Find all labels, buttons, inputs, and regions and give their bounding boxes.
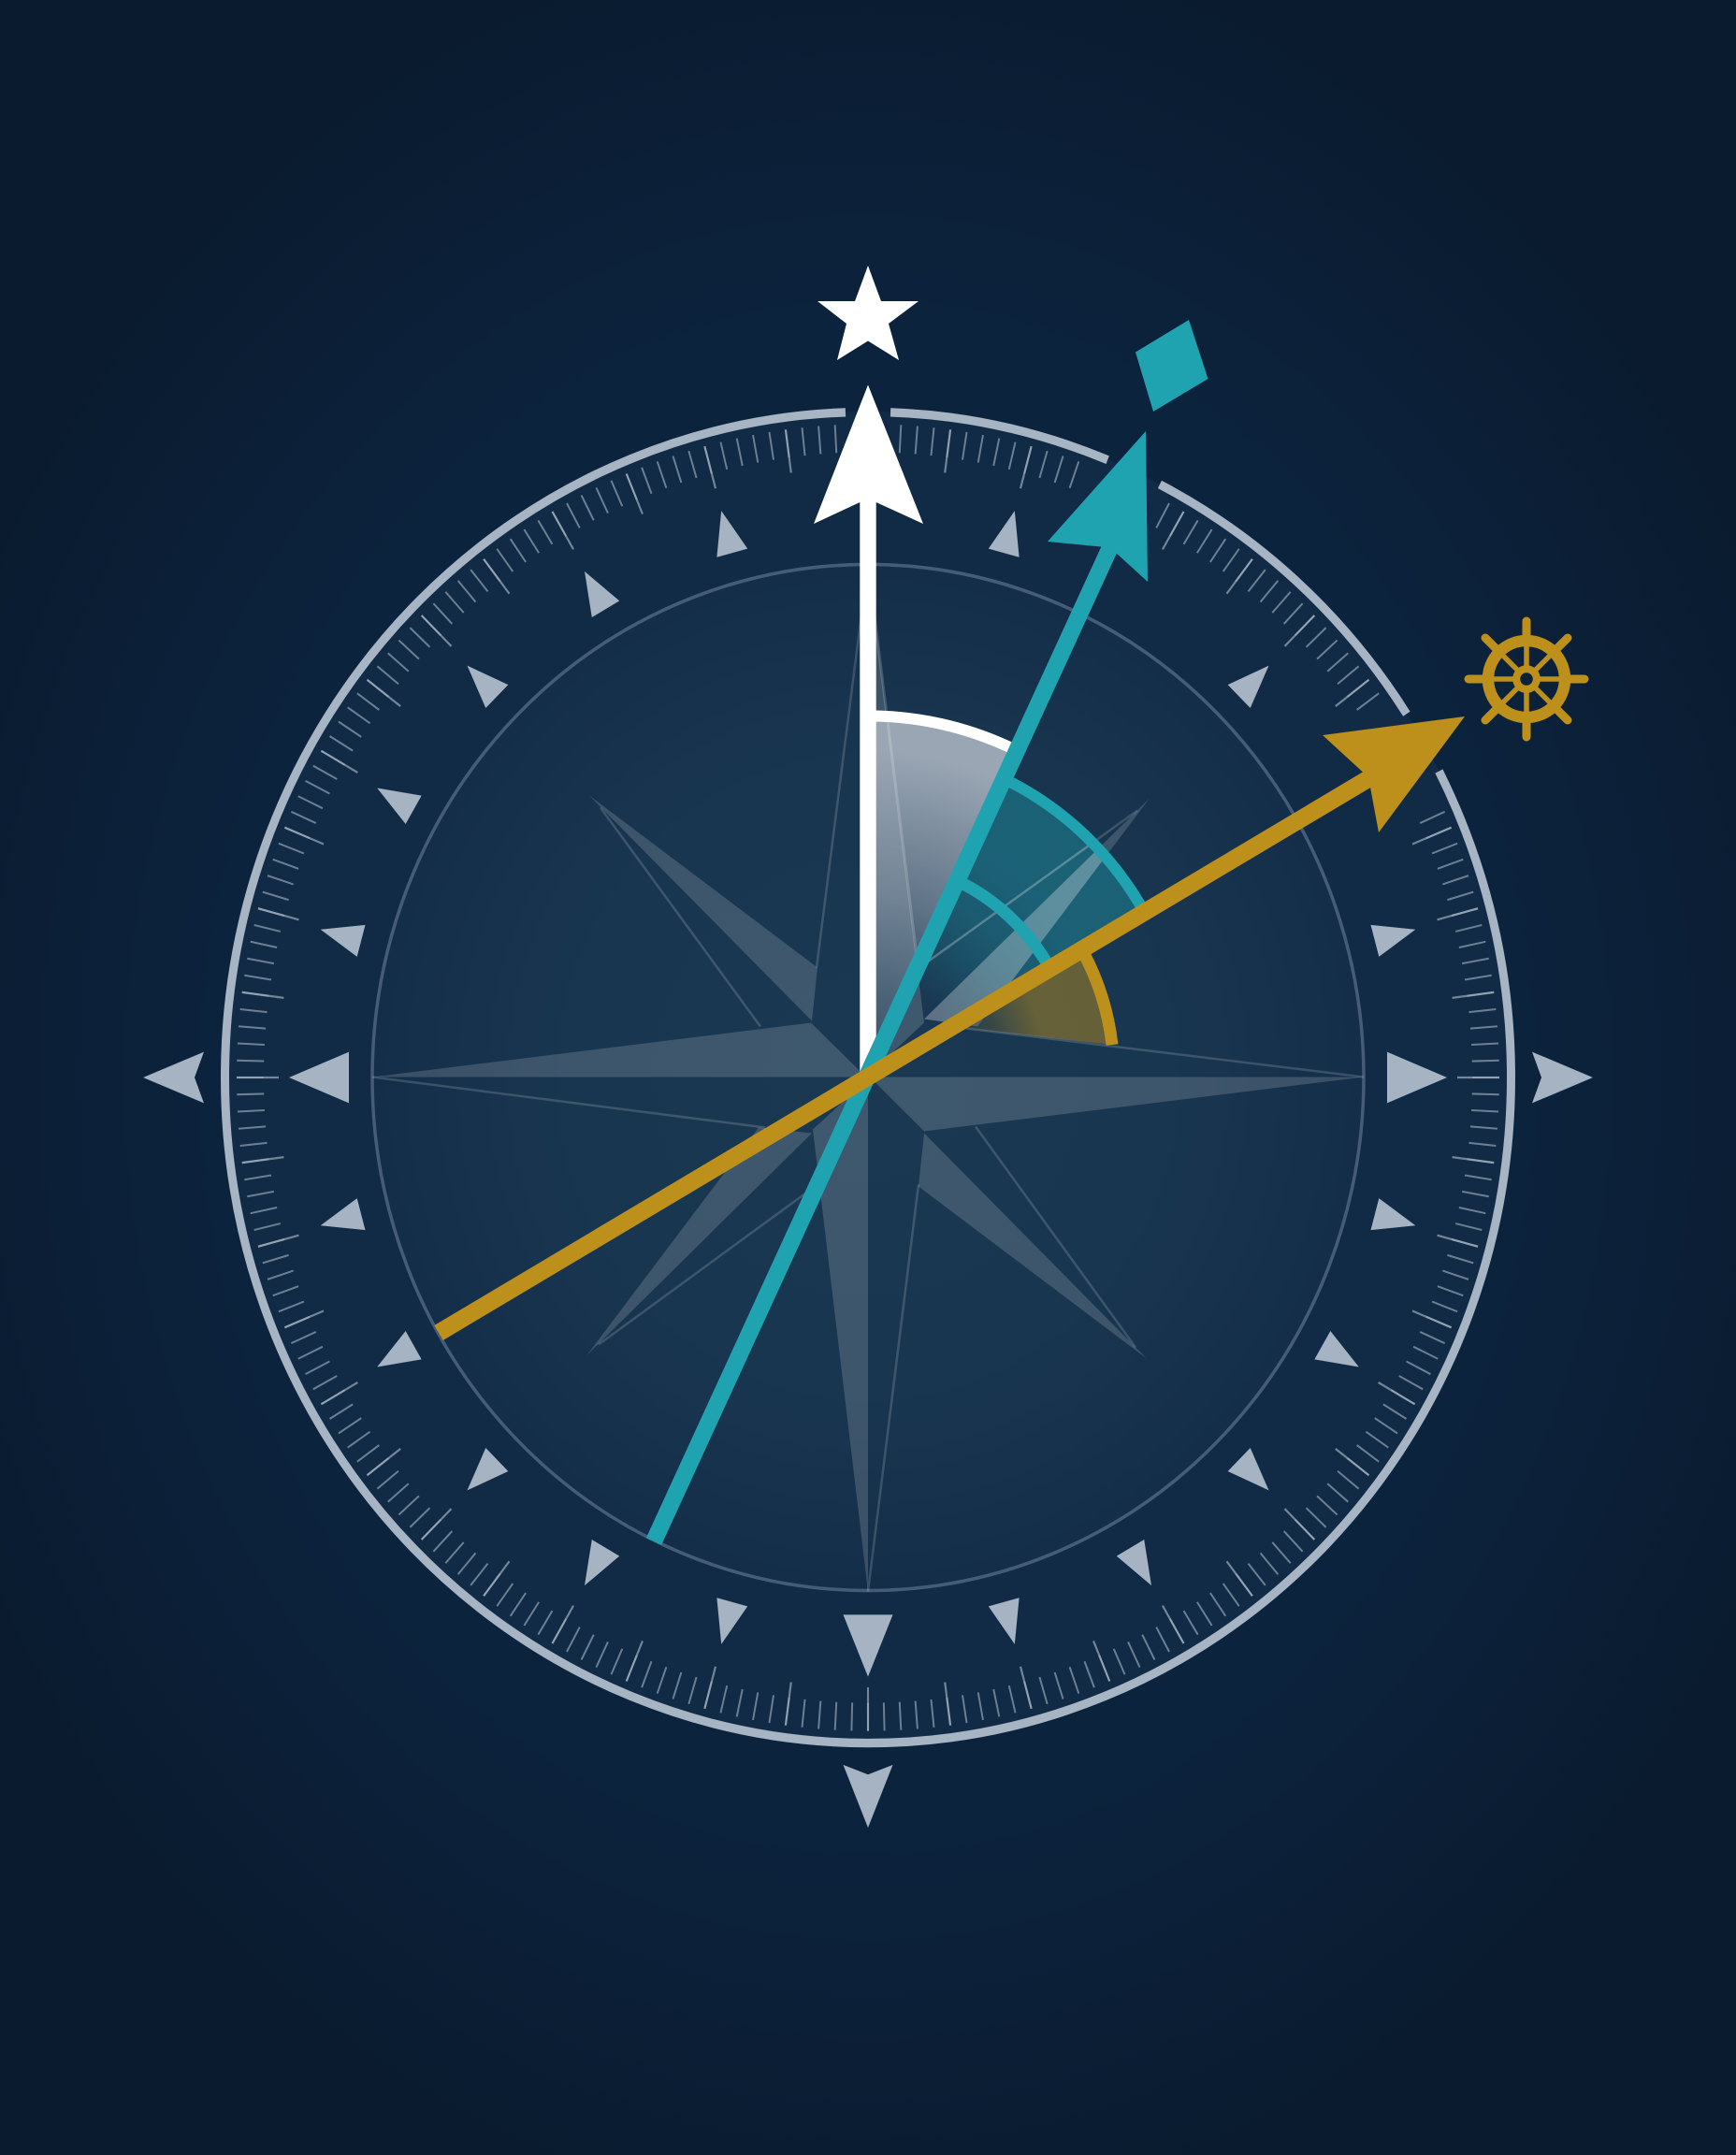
wheel spokes bbox=[1493, 645, 1560, 713]
small bezel triangles bbox=[316, 507, 1420, 1648]
major degree ticks bbox=[258, 446, 1478, 1709]
gold wedge fill bbox=[953, 950, 1112, 1045]
compass rose bbox=[372, 563, 1364, 1592]
angle arc: white bbox=[868, 716, 1018, 751]
rose outline lines bbox=[372, 563, 1364, 1592]
angle arcs: teal bbox=[958, 779, 1145, 969]
teal wedge fill bbox=[868, 779, 1145, 1078]
inner ring bbox=[372, 564, 1364, 1591]
bezel band bbox=[224, 412, 1512, 1743]
rose highlight inside teal wedge bbox=[924, 846, 1102, 1021]
icon: star bbox=[817, 266, 919, 360]
minor degree ticks bbox=[251, 438, 1485, 1717]
rose line over white wedge bbox=[868, 563, 918, 963]
outer ring bbox=[224, 412, 1512, 1743]
large cardinal triangles bbox=[289, 1052, 1447, 1677]
compass infographic bbox=[67, 147, 1671, 2007]
diagonal points bbox=[586, 795, 1150, 1358]
white wedge fill bbox=[868, 716, 1018, 1078]
icon: teal diamond bbox=[1136, 320, 1208, 412]
inner disc bbox=[372, 564, 1364, 1591]
white north arrow bbox=[814, 385, 923, 1072]
wheel hub bbox=[1516, 669, 1537, 689]
teal arrow bbox=[654, 431, 1148, 1541]
compass dial bbox=[143, 412, 1593, 1828]
gold arrow bbox=[439, 716, 1465, 1333]
cardinal points bbox=[372, 563, 1364, 1592]
outer cardinal markers bbox=[143, 1052, 1593, 1828]
angle arc: gold bbox=[1082, 950, 1112, 1045]
wheel handles bbox=[1468, 621, 1584, 737]
icon: ship wheel bbox=[1468, 621, 1584, 737]
wheel rim bbox=[1488, 641, 1565, 717]
